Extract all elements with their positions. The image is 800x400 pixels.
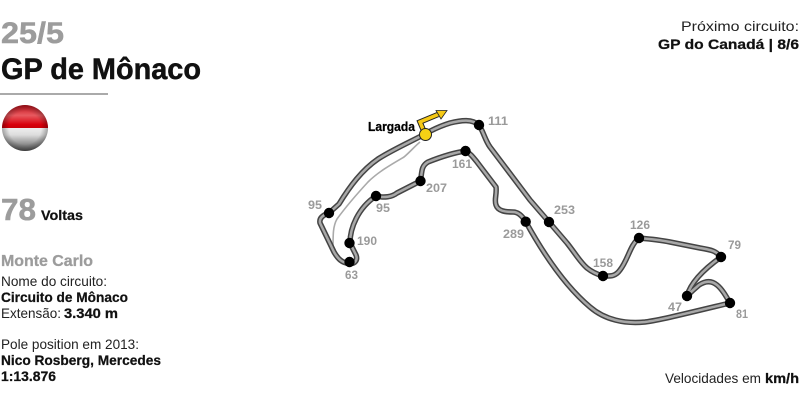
speed labels: 126 bbox=[630, 218, 650, 232]
date: 25/5 bbox=[1, 17, 64, 50]
laps count bbox=[1, 192, 83, 227]
speed labels bbox=[308, 114, 748, 321]
speed labels: 207 bbox=[426, 181, 447, 195]
speed labels: 95 bbox=[376, 201, 390, 215]
title: GP de Mônaco bbox=[1, 53, 201, 86]
pole position: 1:13.876 bbox=[1, 368, 56, 384]
speed labels: 289 bbox=[503, 227, 524, 241]
pole position bbox=[1, 336, 161, 384]
next circuit bbox=[658, 18, 799, 52]
laps count: 78 bbox=[1, 192, 36, 227]
circuit info: Nome do circuito: bbox=[1, 273, 107, 289]
circuit info: Circuito de Mônaco bbox=[1, 289, 128, 305]
start marker: Largada bbox=[368, 120, 416, 134]
circuit info: Extensão: bbox=[1, 305, 61, 321]
speed labels: 95 bbox=[308, 198, 322, 212]
speed labels: 253 bbox=[554, 203, 575, 217]
speed nodes bbox=[324, 120, 735, 308]
speed unit note: km/h bbox=[765, 370, 799, 386]
circuit info bbox=[1, 253, 128, 321]
pit lane bbox=[333, 142, 420, 250]
laps count: Voltas bbox=[41, 207, 83, 223]
speed labels: 79 bbox=[728, 238, 741, 252]
next circuit: Próximo circuito: bbox=[681, 18, 799, 34]
next circuit: GP do Canadá | 8/6 bbox=[658, 36, 799, 52]
icon: Monaco flag sphere bbox=[2, 105, 48, 151]
circuit info: Monte Carlo bbox=[1, 253, 93, 270]
title underline bbox=[0, 93, 108, 95]
speed labels: 161 bbox=[452, 157, 472, 171]
speed labels: 63 bbox=[345, 268, 358, 282]
speed labels: 111 bbox=[488, 114, 508, 128]
start marker bbox=[368, 110, 447, 140]
circuit info: 3.340 m bbox=[64, 305, 118, 321]
speed labels: 190 bbox=[357, 234, 377, 248]
track circuit bbox=[320, 121, 730, 322]
speed labels: 47 bbox=[668, 300, 682, 314]
speed labels: 158 bbox=[593, 256, 613, 270]
pole position: Nico Rosberg, Mercedes bbox=[1, 352, 161, 368]
speed labels: 81 bbox=[736, 307, 748, 321]
speed unit note: Velocidades em bbox=[665, 370, 761, 386]
pole position: Pole position em 2013: bbox=[1, 336, 139, 352]
